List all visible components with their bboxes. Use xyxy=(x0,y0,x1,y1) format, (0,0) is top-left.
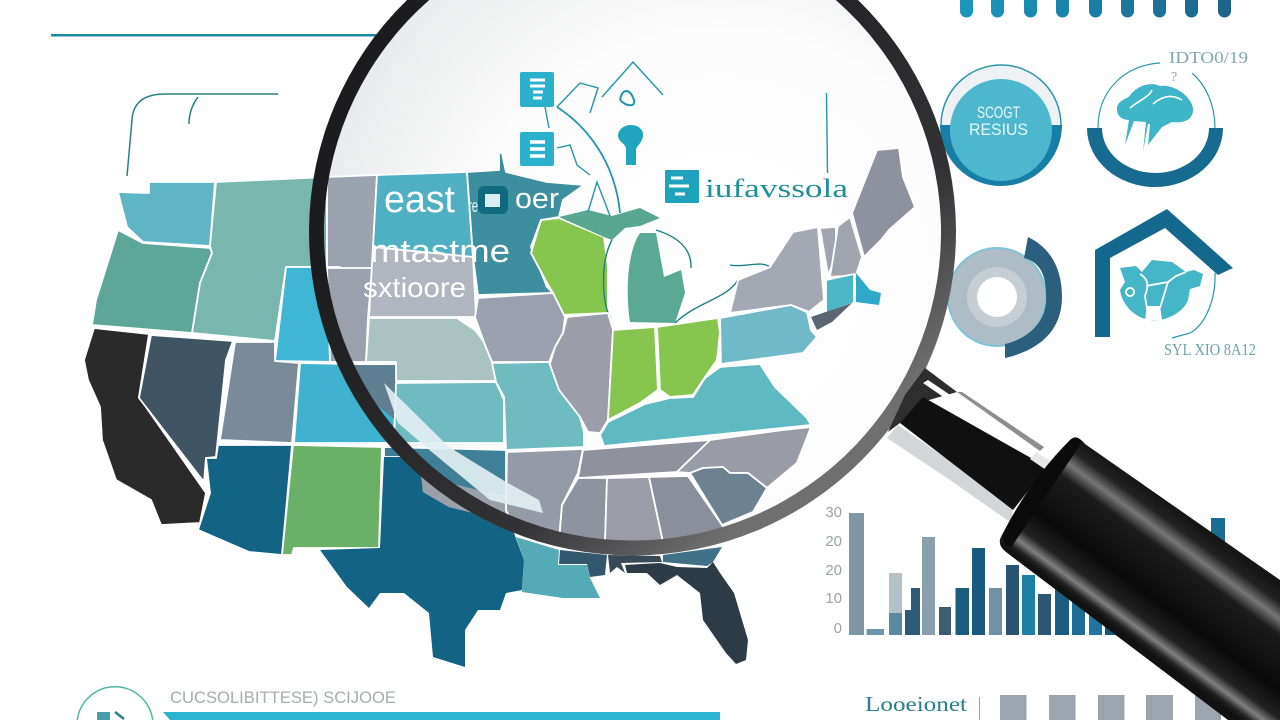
bottom left legend xyxy=(77,687,720,720)
state: Texas xyxy=(320,457,524,667)
state: Ohio xyxy=(657,318,720,397)
label: map text three: oer xyxy=(515,183,559,215)
icon: house outline and connectors xyxy=(545,62,828,216)
house caption: SYL XIO 8A12 xyxy=(1164,340,1256,359)
icon: teal tile two xyxy=(520,132,554,166)
legend label: Looeionet xyxy=(865,692,967,716)
state: Indiana xyxy=(608,327,658,420)
lens ring xyxy=(309,0,956,555)
state: Michigan upper peninsula xyxy=(559,208,660,240)
state: Arizona xyxy=(198,445,292,555)
state: north-central grey xyxy=(327,175,377,362)
state: Arkansas xyxy=(506,449,583,540)
state: Nevada xyxy=(139,335,233,482)
gauge: donut circle xyxy=(948,237,1062,358)
icon: dark badge on map xyxy=(478,186,508,214)
state: Minnesota xyxy=(467,153,584,295)
progress bar xyxy=(163,712,720,720)
state: Georgia xyxy=(649,476,730,542)
icon: house with globe xyxy=(1095,209,1256,359)
icon: circle badge xyxy=(77,687,153,720)
state: Colorado lens section xyxy=(352,365,396,420)
state: Pennsylvania xyxy=(720,305,817,364)
state: Louisiana xyxy=(516,537,600,598)
state: South Carolina xyxy=(690,467,767,525)
state: Colorado xyxy=(294,363,396,443)
icon: teal tile one xyxy=(520,72,554,107)
y axis labels: 20 xyxy=(825,562,842,579)
header rule xyxy=(51,34,466,36)
lens reflection streak xyxy=(384,383,543,513)
state: Nevada lens section xyxy=(327,268,372,362)
state: Alabama xyxy=(605,477,663,542)
state: Kentucky and Virginia xyxy=(600,364,811,446)
gauge text: SCOGT xyxy=(977,103,1020,122)
question mark: ? xyxy=(1171,70,1177,85)
label: map text two: re xyxy=(468,196,478,216)
magnifier xyxy=(309,0,1280,720)
state: Idaho and Montana xyxy=(192,177,327,341)
icon: teal tile three xyxy=(665,170,699,203)
state: Rhode Island xyxy=(856,273,881,305)
state: Texas lens wedge xyxy=(421,476,506,517)
bars xyxy=(849,513,864,635)
US choropleth map xyxy=(84,148,915,667)
state: Illinois xyxy=(549,313,613,433)
top bar strip xyxy=(960,0,1231,18)
state: Washington xyxy=(118,182,215,246)
state: Great Lakes outline xyxy=(604,230,770,323)
state: Mississippi xyxy=(559,478,607,542)
state: Alabama lower xyxy=(608,555,662,573)
state: North Dakota xyxy=(373,172,473,257)
state: North Carolina xyxy=(677,427,811,488)
label: map text one: east xyxy=(384,179,455,221)
state: Connecticut xyxy=(826,274,854,313)
state: Michigan lower peninsula xyxy=(628,233,685,323)
state: New Mexico xyxy=(282,445,382,555)
legend swatches xyxy=(1000,695,1221,720)
state: California xyxy=(84,328,206,525)
state: Georgia lower xyxy=(663,547,722,566)
y axis labels: 20 xyxy=(825,533,842,550)
state: Iowa xyxy=(475,293,565,362)
state: Mississippi lower xyxy=(559,550,607,577)
state: New York xyxy=(730,227,824,313)
handle neck xyxy=(887,368,1052,522)
label: lens caption: iufavssola xyxy=(705,174,849,203)
y axis labels: 0 xyxy=(834,620,842,637)
y axis labels: 30 xyxy=(825,504,842,521)
state: Wisconsin xyxy=(531,218,608,315)
y axis labels: 10 xyxy=(825,590,842,607)
label: map text five: sxtioore xyxy=(363,272,466,303)
state: South Dakota xyxy=(369,247,476,317)
state: Wyoming xyxy=(275,267,340,362)
state: Missouri xyxy=(492,362,584,450)
state: Maine xyxy=(852,148,915,257)
magnifier lens glass xyxy=(317,0,949,548)
state: Oklahoma xyxy=(384,447,506,497)
state: Kansas xyxy=(394,382,504,443)
callout bracket xyxy=(127,94,278,176)
state: Vermont xyxy=(820,227,836,275)
bottom right legend xyxy=(865,692,1221,720)
gauge: weather circle xyxy=(1087,48,1248,187)
state: Utah xyxy=(220,342,299,443)
state: Tennessee xyxy=(578,440,710,478)
state: Nebraska xyxy=(366,318,496,381)
lens annotation icons xyxy=(363,62,849,303)
icon: teal figure xyxy=(618,125,643,165)
gauge: score circle xyxy=(940,65,1062,186)
gauge: score circle: RESIUS xyxy=(969,120,1028,139)
label: map text four: mtastme xyxy=(370,233,510,269)
bar chart xyxy=(825,504,1225,637)
gauge caption: IDTO0/19 xyxy=(1169,48,1248,67)
state: New Hampshire xyxy=(830,217,862,277)
icon: cloud with rain xyxy=(1117,84,1193,152)
legend heading: CUCSOLIBITTESE) SCIJOOE xyxy=(170,688,396,707)
state: New Jersey xyxy=(811,303,852,330)
handle grip xyxy=(1000,437,1280,720)
state: Florida xyxy=(625,562,748,664)
state: Oregon xyxy=(92,230,212,333)
y axis labels xyxy=(825,504,842,637)
